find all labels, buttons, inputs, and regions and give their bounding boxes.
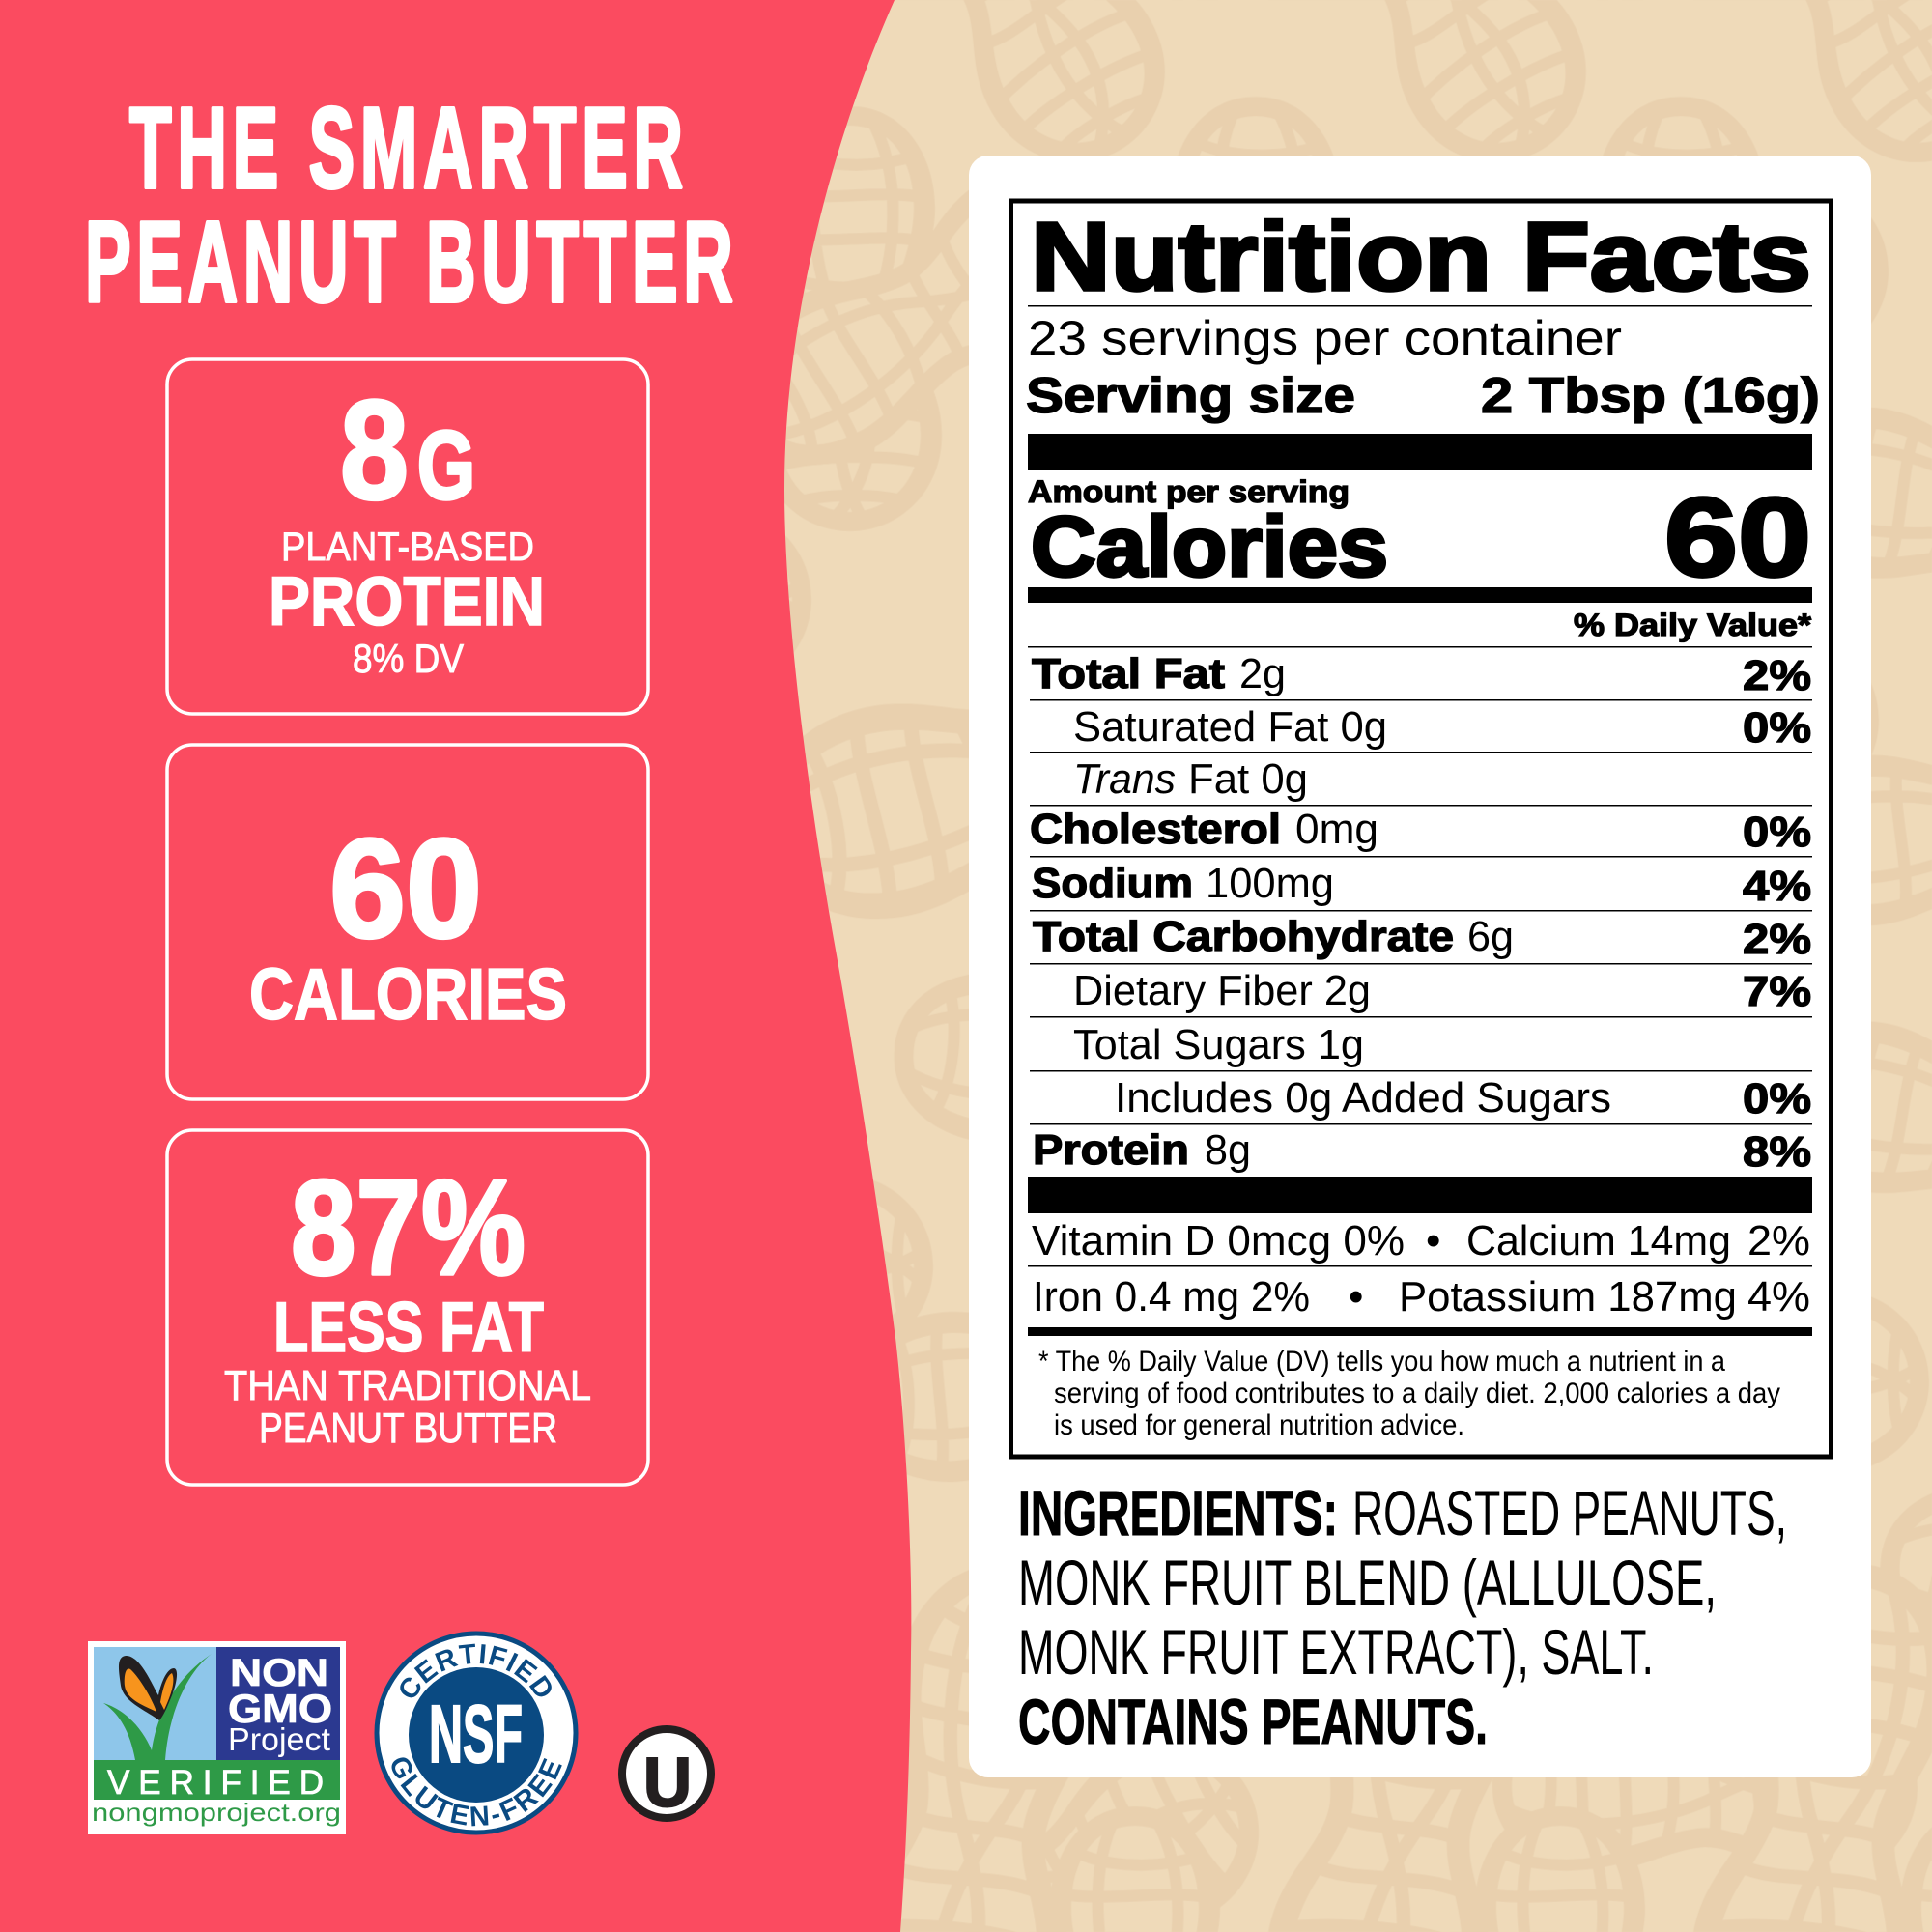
- row dietary fiber: 7%: [1743, 968, 1811, 1015]
- nutrition facts label: [1010, 201, 1832, 1457]
- stat label calories: CALORIES: [249, 953, 567, 1035]
- row added sugars: Includes 0g Added Sugars: [1115, 1074, 1611, 1122]
- nsf mark: NSF: [429, 1689, 523, 1779]
- row cholesterol: 0mg: [1295, 806, 1378, 853]
- vitamins row 2: [1033, 1273, 1810, 1321]
- row total sugars: Total Sugars 1g: [1073, 1021, 1364, 1068]
- stat box: calories: [167, 745, 648, 1099]
- row protein: Protein: [1033, 1126, 1189, 1174]
- stat label plant-based: PLANT-BASED: [281, 524, 534, 569]
- calories: Calories: [1031, 498, 1388, 594]
- row protein: 8%: [1743, 1128, 1811, 1176]
- badge: kosher u: [622, 1729, 711, 1822]
- row total carbohydrate: Total Carbohydrate: [1033, 913, 1454, 960]
- stat box: less fat: [167, 1130, 648, 1485]
- vitamins row 2: Potassium 187mg: [1399, 1273, 1737, 1321]
- badge url: nongmoproject.org: [92, 1798, 341, 1827]
- ingredients: CONTAINS PEANUTS.: [1018, 1686, 1488, 1757]
- badge text non gmo: Project: [228, 1721, 330, 1757]
- row sodium: 4%: [1743, 863, 1811, 910]
- row trans fat: Fat 0g: [1188, 755, 1308, 803]
- white nutrition card: [969, 156, 1871, 1777]
- row protein: 8g: [1205, 1126, 1251, 1174]
- row cholesterol: Cholesterol: [1030, 806, 1281, 853]
- row cholesterol: [1030, 806, 1811, 856]
- row sodium: [1032, 860, 1811, 910]
- heading nutrition facts: Nutrition Facts: [1031, 203, 1811, 311]
- ingredients: INGREDIENTS:: [1018, 1477, 1338, 1548]
- vitamins row 1: Vitamin D 0mcg 0%: [1032, 1217, 1405, 1264]
- row total fat: 2%: [1743, 652, 1811, 699]
- stat note: THAN TRADITIONAL: [224, 1362, 591, 1409]
- row trans fat: Trans: [1073, 755, 1176, 803]
- stat label protein: PROTEIN: [269, 564, 545, 640]
- servings: 23 servings per container: [1028, 311, 1622, 365]
- badge text non gmo: VERIFIED: [107, 1764, 329, 1802]
- daily value header: % Daily Value*: [1574, 608, 1812, 642]
- left red panel with curved edge: [0, 0, 911, 1932]
- badge: nsf certified gluten-free: [375, 1631, 578, 1835]
- stat box: protein: [167, 359, 648, 714]
- row added sugars: 0%: [1743, 1075, 1811, 1122]
- title: THE SMARTER: [129, 83, 683, 212]
- footnote: is used for general nutrition advice.: [1054, 1409, 1464, 1441]
- serving size: [1026, 368, 1820, 424]
- calories: 60: [1664, 474, 1811, 600]
- title: [85, 83, 733, 326]
- badge text non gmo: NON: [230, 1652, 328, 1694]
- footnote: * The % Daily Value (DV) tells you how much a nutrient in a: [1038, 1346, 1725, 1378]
- vitamins row 2: 4%: [1747, 1273, 1810, 1321]
- curved text gluten-free: GLUTEN-FREE: [392, 1757, 562, 1826]
- vitamins row 2: Iron 0.4 mg 2%: [1033, 1273, 1310, 1321]
- serving size: 2 Tbsp (16g): [1481, 368, 1820, 424]
- letter u: U: [643, 1745, 692, 1822]
- row saturated fat: Saturated Fat 0g: [1073, 703, 1387, 751]
- badge text non gmo: [107, 1652, 332, 1802]
- icon: green sprout: [103, 1654, 212, 1760]
- vitamins row 1: Calcium 14mg: [1466, 1217, 1731, 1264]
- row cholesterol: 0%: [1743, 809, 1811, 856]
- stat value 8g: [340, 371, 475, 528]
- row protein: [1033, 1126, 1811, 1176]
- row sodium: Sodium: [1032, 860, 1193, 907]
- icon: butterfly: [119, 1656, 177, 1720]
- ingredients: MONK FRUIT EXTRACT), SALT.: [1018, 1616, 1654, 1688]
- row total carbohydrate: 2%: [1743, 916, 1811, 963]
- stat value 8g: 8: [340, 371, 409, 528]
- row dietary fiber: Dietary Fiber 2g: [1073, 967, 1371, 1014]
- badge text non gmo: GMO: [228, 1686, 332, 1731]
- row total carbohydrate: 6g: [1467, 913, 1514, 960]
- stat note dv: 8% DV: [353, 636, 464, 681]
- stat label less fat: LESS FAT: [273, 1289, 544, 1367]
- stat note: PEANUT BUTTER: [259, 1405, 557, 1452]
- row total fat: [1032, 650, 1811, 699]
- footnote: [1038, 1346, 1780, 1441]
- ingredients: [1018, 1477, 1787, 1757]
- calories: [1031, 474, 1811, 600]
- stat value 8g: G: [417, 412, 475, 520]
- amount per serving: Amount per serving: [1028, 474, 1350, 509]
- row dietary fiber: [1073, 967, 1811, 1015]
- stat note: [224, 1362, 591, 1452]
- row added sugars: [1115, 1074, 1811, 1122]
- stat value 87%: 87%: [291, 1151, 526, 1303]
- title: PEANUT BUTTER: [85, 197, 733, 326]
- curved text certified: CERTIFIED: [400, 1644, 552, 1698]
- vitamins row 1: •: [1426, 1217, 1440, 1264]
- footnote: serving of food contributes to a daily diet. 2,000 calories a day: [1054, 1378, 1780, 1409]
- row sodium: 100mg: [1206, 860, 1334, 907]
- row trans fat: [1073, 755, 1308, 803]
- vitamins row 2: •: [1349, 1273, 1363, 1321]
- stat value 60: 60: [329, 810, 482, 967]
- row total fat: Total Fat: [1032, 650, 1225, 697]
- vitamins row 1: [1032, 1217, 1810, 1264]
- vitamins row 1: 2%: [1747, 1217, 1810, 1264]
- row total carbohydrate: [1033, 913, 1811, 963]
- row total fat: 2g: [1239, 650, 1286, 697]
- serving size: Serving size: [1026, 368, 1355, 424]
- row saturated fat: 0%: [1743, 704, 1811, 752]
- badge: non gmo project verified: [88, 1641, 346, 1834]
- row saturated fat: [1073, 703, 1811, 752]
